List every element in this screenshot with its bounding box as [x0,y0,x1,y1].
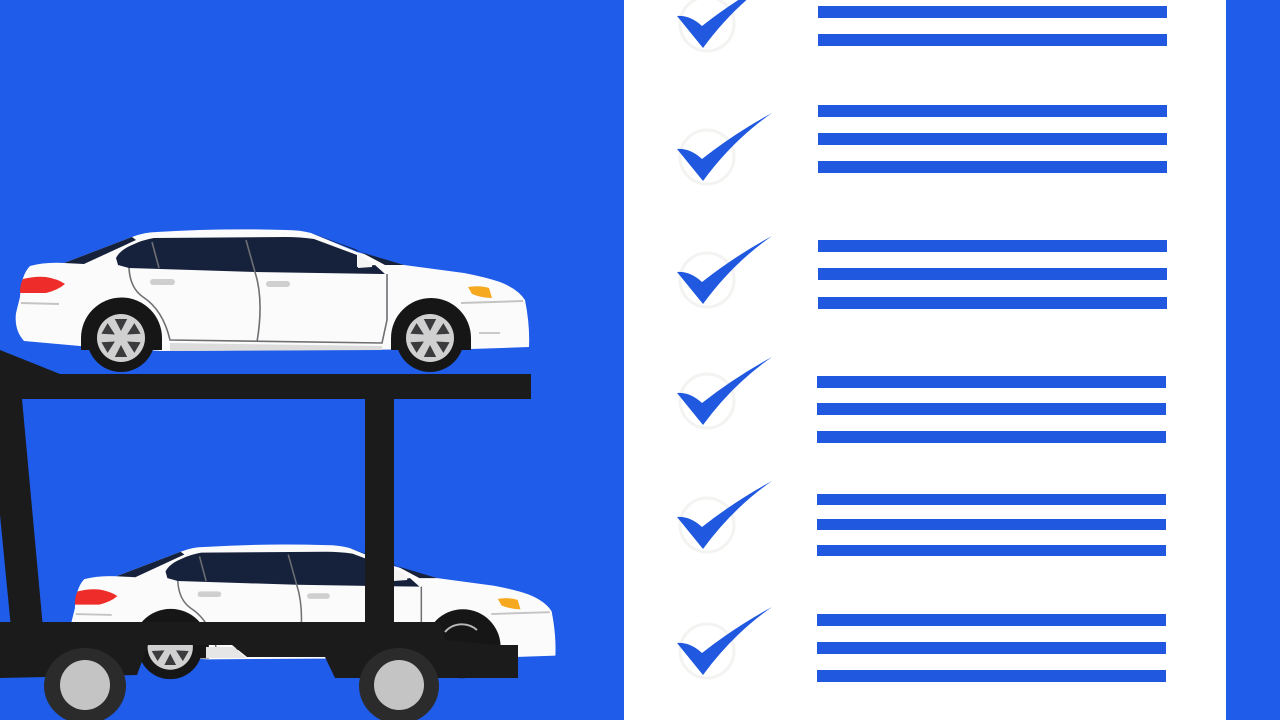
panel: checklist [624,0,1226,720]
checklist row 2 [677,105,1167,184]
truck wheel: front [359,648,439,720]
checklist row 5 [677,481,1166,556]
car: lower deck [71,544,556,679]
checklist row 6 [677,607,1166,682]
car: upper deck [16,229,529,372]
checklist row 4 [677,357,1166,443]
checklist row 1 [677,0,1167,51]
checklist row 3 [677,236,1167,309]
truck carrier frame [0,350,531,678]
truck wheel: rear [44,648,126,720]
car underbody patch [206,647,246,658]
